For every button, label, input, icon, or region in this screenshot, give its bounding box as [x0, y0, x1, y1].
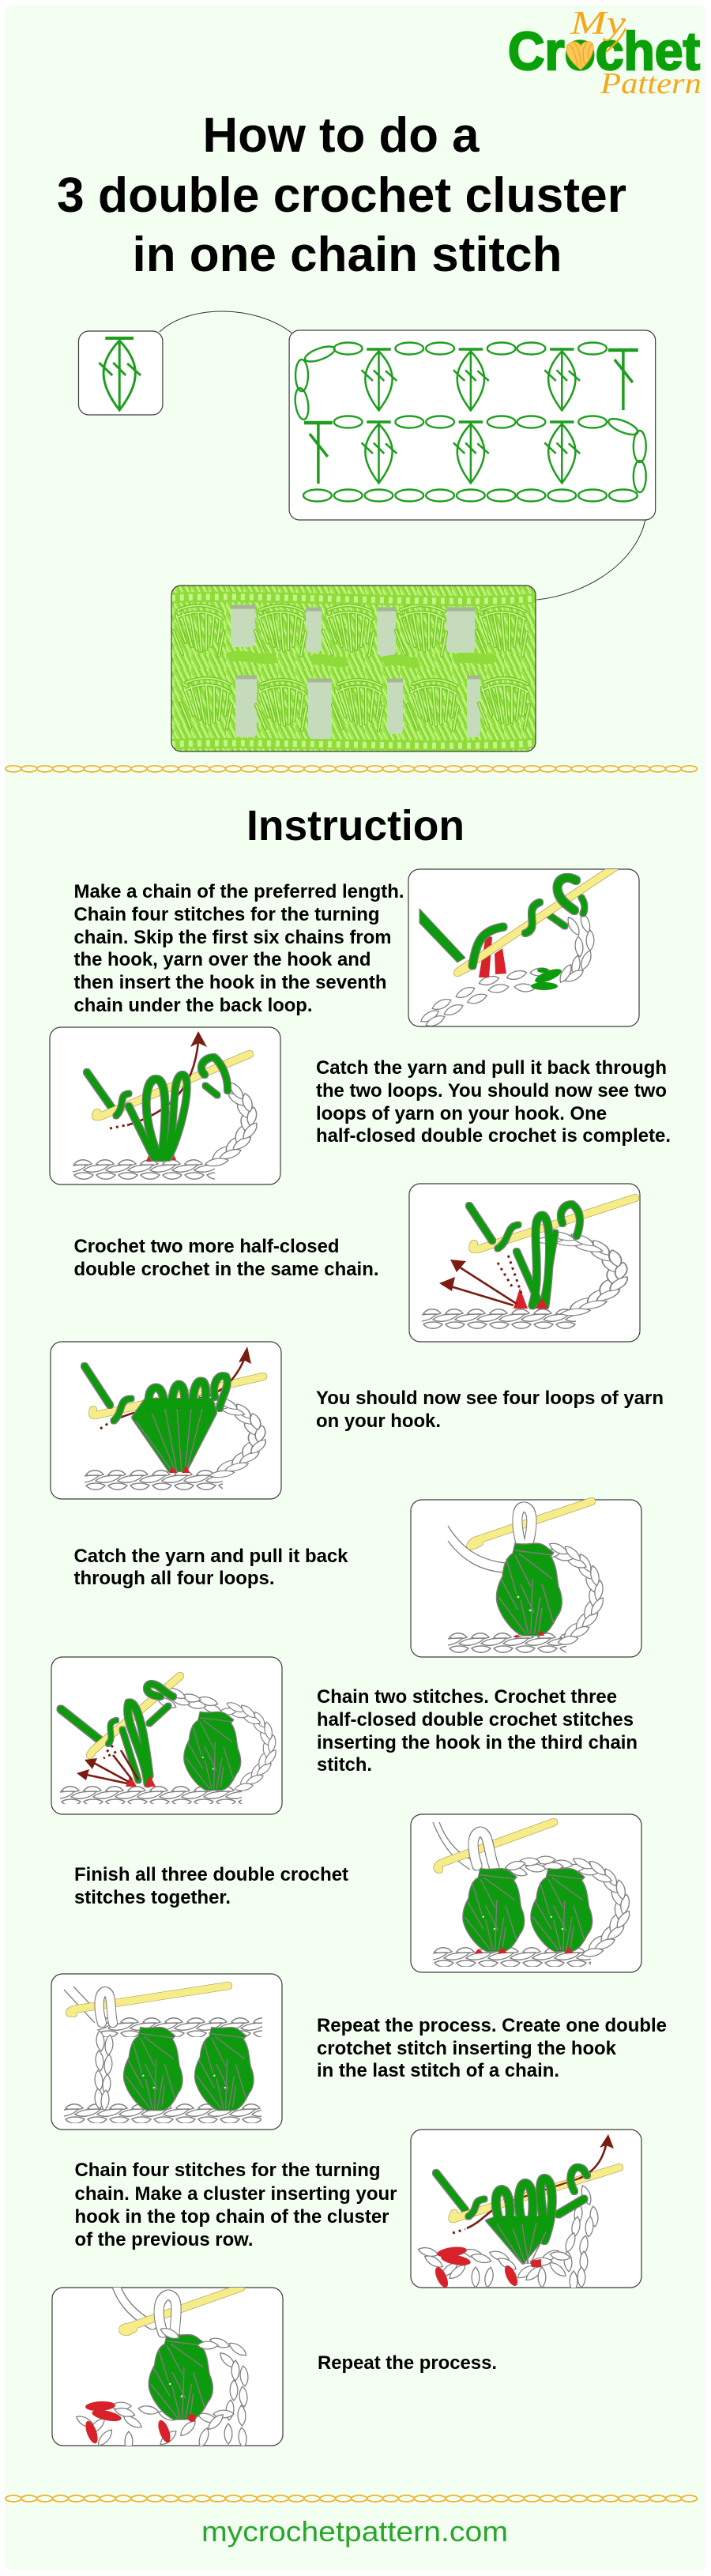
step 8 text: Repeat the process. Create one double	[317, 2015, 667, 2036]
hook	[452, 2167, 619, 2219]
back strand	[87, 1072, 217, 1109]
step 9 illustration	[411, 2130, 641, 2292]
step 9 text: Chain four stitches for the turning	[74, 2160, 381, 2181]
white yarn tail	[448, 1526, 505, 1572]
step 5 text: through all four loops.	[74, 1568, 275, 1589]
white yarn tail	[116, 2286, 152, 2326]
step 2 text: the two loops. You should now see two	[316, 1080, 667, 1102]
step 1 text: chain under the back loop.	[74, 995, 313, 1016]
red stitches	[433, 2245, 541, 2289]
step 3 text: double crochet in the same chain.	[74, 1259, 379, 1280]
step 7 text: Finish all three double crochet	[74, 1864, 348, 1885]
step 4 text	[316, 1388, 664, 1432]
hook	[122, 2288, 241, 2332]
step 8 illustration	[51, 1974, 282, 2130]
white loop	[100, 1991, 113, 2023]
white loop	[473, 1832, 495, 1868]
turning chain	[205, 1081, 260, 1168]
logo word: My: My	[570, 6, 626, 42]
step 9 text: hook in the top chain of the cluster	[74, 2206, 389, 2228]
hook	[457, 867, 615, 973]
white yarn tails	[433, 1822, 476, 1870]
arrow	[453, 2134, 614, 2233]
step 1 text: Chain four stitches for the turning	[74, 904, 379, 925]
red stitches	[479, 936, 506, 977]
white loop	[517, 1507, 532, 1543]
logo word: Crochet: Crochet	[508, 21, 700, 81]
step 6 text: half-closed double crochet stitches	[317, 1709, 634, 1731]
green columns	[468, 2167, 587, 2264]
clusters	[463, 1868, 592, 1952]
hook	[90, 1676, 180, 1755]
chart: double crochet symbols	[304, 350, 638, 484]
step 9 text: of the previous row.	[74, 2229, 253, 2250]
step 2 text: half-closed double crochet is complete.	[316, 1125, 671, 1147]
photo: gaps between clusters	[231, 604, 480, 739]
logo word: Pattern: Pattern	[600, 67, 702, 100]
chart: clusters row 1	[362, 349, 580, 410]
green yarn tail	[419, 909, 465, 962]
hook	[70, 1986, 228, 2013]
step 2 text	[316, 1057, 671, 1147]
hook	[437, 1822, 554, 1870]
step 2 text: Catch the yarn and pull it back through	[316, 1057, 667, 1079]
step 6 text: inserting the hook in the third chain	[317, 1732, 638, 1753]
green yarn	[469, 1204, 580, 1305]
cluster	[184, 1712, 241, 1791]
step 8 text: in the last stitch of a chain.	[317, 2060, 559, 2081]
turning chain	[156, 1685, 279, 1792]
arrows	[77, 1746, 138, 1783]
photo: top and bottom chain bands	[171, 597, 536, 746]
red stitches	[146, 1155, 176, 1162]
step 6 illustration	[51, 1657, 282, 1814]
heading: Instruction: Instruction	[246, 802, 465, 849]
red stitches	[514, 1288, 548, 1309]
cluster inner lines	[497, 2223, 546, 2264]
panel: crochet chart	[289, 330, 656, 520]
step 3 text: Crochet two more half-closed	[74, 1236, 340, 1257]
foundation chain	[448, 1632, 566, 1654]
back strands	[61, 1706, 168, 1739]
step 1 text	[74, 881, 404, 1016]
white chain base	[74, 2402, 234, 2452]
connector: symbol to chart	[160, 311, 292, 333]
logo heart yarn ball	[566, 42, 593, 70]
step 6 text	[317, 1686, 638, 1776]
step 2 text: loops of yarn on your hook. One	[316, 1103, 607, 1124]
top and turning chain	[504, 1855, 633, 1958]
foundation chain	[85, 1469, 223, 1491]
top chain	[97, 2017, 262, 2037]
connector: chart to photo	[536, 520, 645, 600]
step 6 text: Chain two stitches. Crochet three	[317, 1686, 617, 1708]
divider: yarn chain	[6, 766, 697, 772]
cluster	[496, 1543, 562, 1636]
green marks on chain	[531, 968, 562, 990]
logo: My Crochet Pattern	[508, 6, 702, 100]
panel: single cluster symbol	[78, 331, 163, 415]
step 10 illustration	[52, 2286, 283, 2452]
turning chain	[198, 1395, 266, 1478]
footer: website: mycrochetpattern.com	[201, 2515, 508, 2548]
white chain pile	[417, 2184, 599, 2292]
red stitches	[83, 2401, 196, 2445]
divider: yarn chain (bottom)	[6, 2495, 697, 2502]
white yarn tail	[64, 1987, 99, 2023]
chart: chain stitches	[293, 343, 646, 501]
clusters	[124, 2028, 254, 2111]
step 8 text	[317, 2015, 667, 2081]
hook	[472, 1198, 635, 1249]
green yarn	[116, 1057, 228, 1158]
step 5 text	[74, 1546, 348, 1589]
back strands	[436, 2173, 584, 2214]
step 1 text: the hook, yarn over the hook and	[74, 949, 371, 970]
step 7 text: stitches together.	[74, 1887, 231, 1908]
step 9 text: chain. Make a cluster inserting your	[74, 2183, 397, 2205]
turning chain	[540, 1231, 628, 1316]
foundation chain	[73, 1158, 215, 1181]
photo: middle connecting chains	[229, 656, 494, 663]
hook	[470, 1501, 592, 1546]
step 1 illustration	[408, 867, 639, 1029]
step 2 illustration	[50, 1027, 280, 1184]
turning chain	[540, 1541, 606, 1646]
step 4 illustration	[51, 1342, 281, 1499]
white chain	[419, 912, 594, 1029]
step 3 illustration	[409, 1184, 640, 1342]
cluster	[149, 2334, 213, 2420]
red stitches	[513, 1630, 544, 1637]
title	[57, 108, 626, 282]
arrow	[110, 1031, 207, 1128]
bottom chain	[64, 2103, 261, 2123]
step 6 text: stitch.	[317, 1754, 372, 1776]
step 1 text: Make a chain of the preferred length.	[74, 881, 404, 902]
step 9 text	[74, 2160, 397, 2250]
photo: crocheted cluster swatch	[171, 586, 536, 751]
vertical chain	[94, 2031, 114, 2111]
fan inner lines	[136, 1409, 202, 1472]
white loop	[159, 2295, 176, 2333]
arrows	[439, 1255, 521, 1305]
step 5 text: Catch the yarn and pull it back	[74, 1546, 348, 1567]
foundation chain	[422, 1308, 576, 1330]
step 5 illustration	[411, 1500, 641, 1657]
green yarn loops	[472, 878, 576, 966]
step 3 text	[74, 1236, 379, 1280]
step 7 illustration	[411, 1814, 641, 1972]
knot and top link	[159, 2326, 218, 2349]
hook	[92, 1377, 263, 1415]
logo word: My	[570, 6, 626, 52]
foundation chain	[60, 1785, 242, 1804]
photo: gap shadows	[231, 607, 480, 680]
green yarn	[108, 1684, 173, 1783]
title: 3 double crochet cluster	[57, 168, 626, 223]
step 4 text: You should now see four loops of yarn	[316, 1388, 664, 1409]
step 1 text: chain. Skip the first six chains from	[74, 927, 392, 948]
step 1 text: then insert the hook in the seventh	[74, 972, 387, 993]
back strand	[549, 898, 585, 926]
photo frame	[171, 586, 536, 751]
white chain right side	[209, 2336, 249, 2448]
step 4 text: on your hook.	[316, 1410, 441, 1432]
arrow	[100, 1346, 251, 1429]
red stitches	[126, 1776, 156, 1787]
red stitches	[474, 1947, 574, 1953]
step 10 text: Repeat the process.	[318, 2352, 497, 2374]
step 7 text	[74, 1864, 348, 1908]
green fan of loops	[85, 1366, 228, 1471]
foundation chain	[433, 1946, 591, 1967]
photo: upper and lower cluster strands	[173, 605, 529, 730]
title: in one chain stitch	[133, 228, 562, 282]
title: How to do a	[202, 108, 480, 163]
hook	[96, 1054, 250, 1117]
step 8 text: crotchet stitch inserting the hook	[317, 2038, 617, 2059]
chart: clusters row 2	[362, 422, 580, 483]
